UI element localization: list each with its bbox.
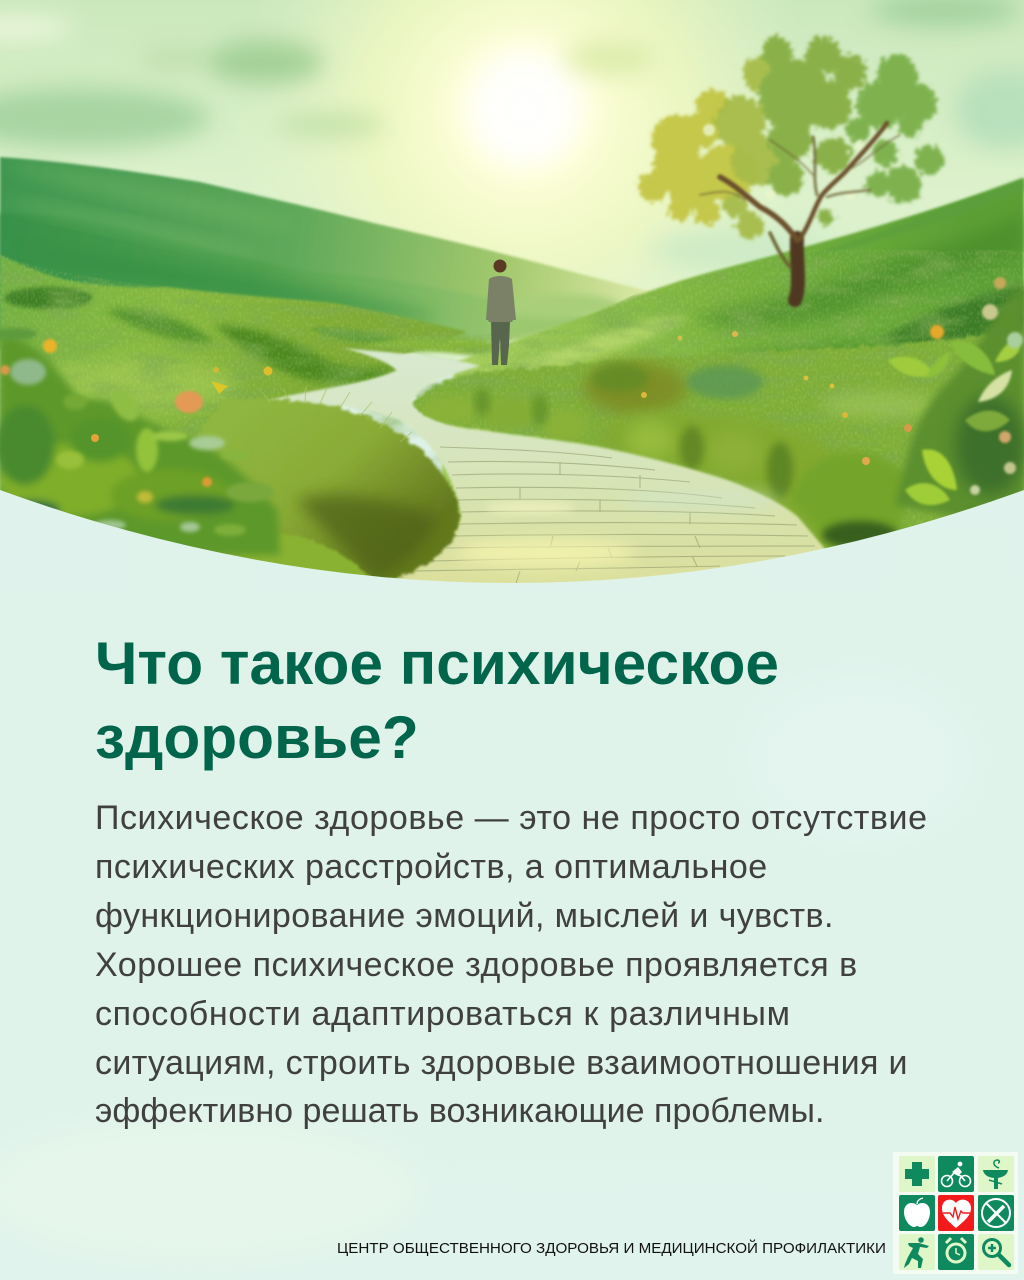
icon: apple bbox=[899, 1195, 935, 1231]
front grass mound bbox=[200, 386, 460, 590]
logo: icon grid bbox=[893, 1152, 1018, 1274]
person bbox=[486, 260, 516, 365]
tree foliage bbox=[638, 36, 945, 239]
body text: психических расстройств, а оптимальное bbox=[95, 848, 768, 886]
body text: Хорошее психическое здоровье проявляется в bbox=[95, 946, 858, 984]
sky with sun bbox=[0, 0, 1024, 360]
icon: alarm clock bbox=[938, 1234, 974, 1270]
path paving lines bbox=[415, 447, 815, 583]
grass streak texture bbox=[0, 250, 1024, 530]
right hill bbox=[440, 176, 1024, 524]
tree trunk and branches bbox=[700, 123, 900, 300]
organisation name: ЦЕНТР ОБЩЕСТВЕННОГО ЗДОРОВЬЯ И МЕДИЦИНСКОЙ ПРОФИЛАКТИКИ bbox=[337, 1240, 886, 1257]
flowers right bbox=[641, 325, 944, 465]
body text: способности адаптироваться к различным bbox=[95, 995, 791, 1033]
flowers left bbox=[0, 339, 272, 487]
icon: medical cross bbox=[899, 1156, 935, 1192]
right foreground bush bbox=[888, 277, 1024, 530]
body text: ситуациям, строить здоровые взаимоотношения и bbox=[95, 1044, 908, 1082]
path highlights bbox=[455, 539, 635, 567]
body text: функционирование эмоций, мыслей и чувств. bbox=[95, 897, 834, 935]
tree bbox=[638, 36, 945, 300]
title: здоровье? bbox=[95, 703, 419, 771]
left bush leaves bbox=[0, 328, 274, 536]
icon: runner bbox=[899, 1234, 935, 1270]
far left hills bbox=[0, 155, 670, 350]
grass wisps bbox=[262, 386, 412, 442]
right bush leaves bbox=[888, 277, 1023, 511]
winding stone path bbox=[260, 348, 826, 600]
clouds bbox=[0, 0, 1024, 270]
right mound shading bbox=[422, 362, 940, 550]
title bbox=[95, 629, 779, 771]
icon: no smoking bbox=[978, 1195, 1014, 1231]
body text: эффективно решать возникающие проблемы. bbox=[95, 1092, 824, 1130]
title: Что такое психическое bbox=[95, 629, 779, 697]
body text bbox=[95, 799, 928, 1130]
soft light patches on the panel bbox=[0, 680, 970, 1260]
icon: bicycle bbox=[938, 1156, 974, 1192]
icon: heart with pulse bbox=[938, 1195, 974, 1231]
landscape illustration bbox=[0, 0, 1024, 600]
left meadow bbox=[0, 255, 502, 590]
right grass mounds bbox=[412, 332, 1024, 528]
icon: bowl of hygieia bbox=[978, 1156, 1014, 1192]
panel: background and landscape illustration bbox=[0, 0, 1024, 583]
sky gaps in the foliage bbox=[703, 124, 865, 209]
icon: magnifier bbox=[978, 1234, 1014, 1270]
body text: Психическое здоровье — это не просто отсутствие bbox=[95, 799, 928, 837]
left foreground bush bbox=[0, 335, 280, 555]
